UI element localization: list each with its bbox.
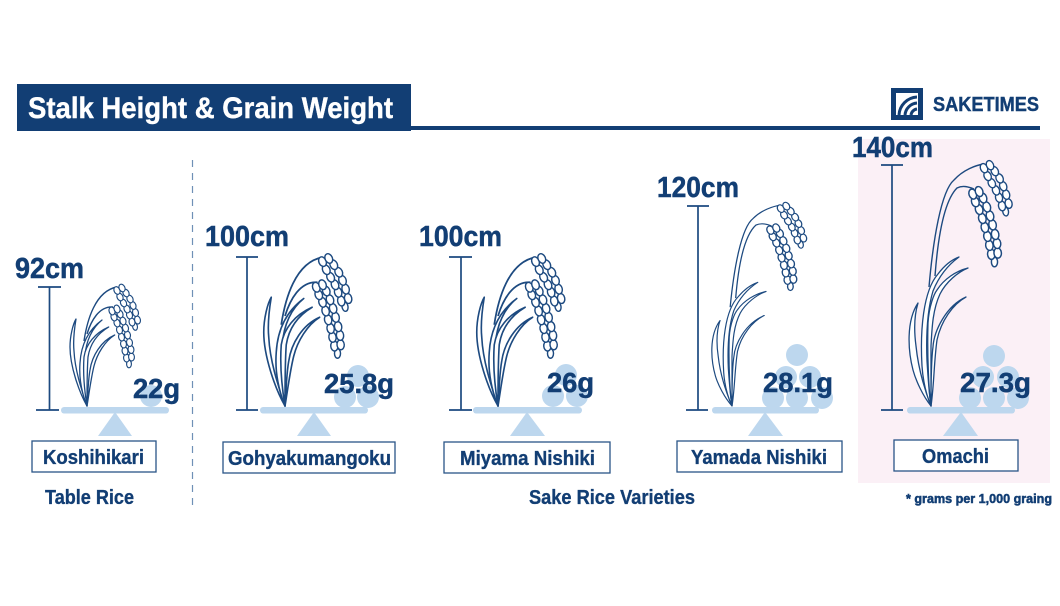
header: title banner (17, 84, 1040, 131)
icon: rice plant (477, 252, 566, 406)
scale (61, 407, 169, 436)
column: Omachi (852, 132, 1031, 471)
height label: 140cm: 140cm (852, 132, 933, 164)
height label: 120cm: 120cm (657, 172, 739, 204)
weight label: 26g: 26g (547, 367, 594, 398)
height bar (686, 206, 709, 410)
grain circles (959, 345, 1029, 409)
name label: Koshihikari (32, 441, 156, 472)
column: Koshihikari (15, 253, 180, 472)
name label: Yamada Nishiki: Yamada Nishiki (691, 447, 827, 469)
icon: rice plant (264, 252, 353, 406)
name label: Miyama Nishiki: Miyama Nishiki (460, 448, 595, 470)
divider: table rice vs sake rice (192, 160, 194, 506)
weight label: 27.3g: 27.3g (960, 367, 1031, 398)
grain circles (542, 364, 588, 407)
name label: Miyama Nishiki (444, 442, 610, 473)
column: Miyama Nishiki (419, 221, 610, 473)
name label: Gohyakumangoku: Gohyakumangoku (228, 448, 391, 470)
grain circles (762, 344, 833, 409)
weight label: 28.1g: 28.1g (763, 367, 833, 398)
icon: rice plant (712, 201, 807, 406)
footnote: * grams per 1,000 graing (906, 492, 1052, 506)
height bar (36, 287, 61, 410)
column: Gohyakumangoku (205, 221, 395, 473)
height label: 100cm: 100cm (419, 221, 502, 253)
logo: SAKETIMES (891, 88, 1039, 120)
name label: Omachi: Omachi (922, 446, 989, 468)
height bar (236, 257, 258, 410)
scale (473, 407, 582, 436)
icon: rice plant (909, 159, 1013, 406)
panel: Omachi highlight background (858, 139, 1050, 483)
column: Yamada Nishiki (657, 172, 842, 472)
category label: Sake Rice Varieties: Sake Rice Varieties (529, 487, 695, 509)
scale (712, 407, 819, 436)
height label: 92cm: 92cm (15, 253, 84, 285)
icon: rice plant (70, 283, 141, 406)
header: title banner: Stalk Height & Grain Weight (28, 92, 393, 125)
height bar (881, 165, 903, 410)
category label: Table Rice: Table Rice (45, 487, 134, 509)
grain circles (140, 385, 162, 407)
name label: Omachi (894, 440, 1018, 471)
scale (907, 407, 1015, 436)
grain circles (334, 365, 379, 408)
height bar (449, 257, 472, 410)
logo: SAKETIMES: SAKETIMES (933, 94, 1039, 116)
name label: Yamada Nishiki (677, 441, 842, 472)
weight label: 22g: 22g (133, 373, 180, 404)
name label: Gohyakumangoku (223, 442, 395, 473)
weight label: 25.8g: 25.8g (324, 368, 394, 399)
name label: Koshihikari: Koshihikari (43, 447, 144, 469)
height label: 100cm: 100cm (205, 221, 289, 253)
scale (260, 407, 368, 436)
